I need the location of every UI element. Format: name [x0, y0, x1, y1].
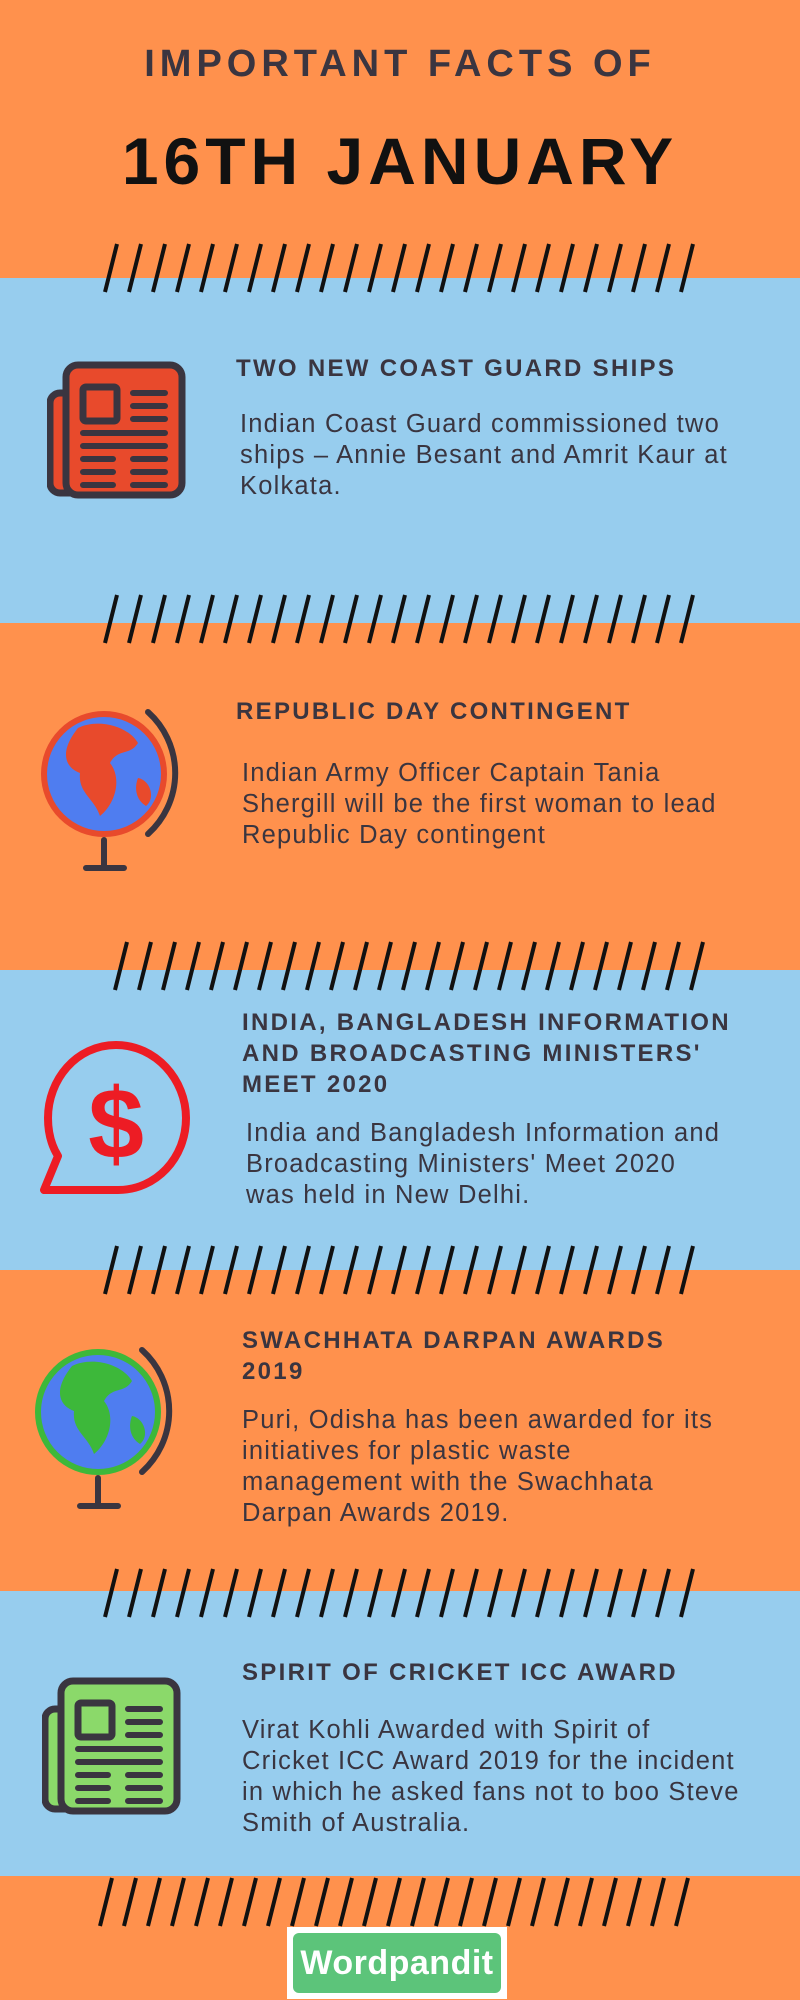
heading: INDIA, BANGLADESH INFORMATION	[242, 1009, 731, 1036]
text	[242, 1406, 713, 1527]
icon: globe red	[41, 709, 178, 871]
title: 16TH JANUARY	[122, 124, 678, 198]
icon: newspaper green	[42, 1678, 180, 1814]
panel: ministers meet	[40, 1009, 731, 1209]
text: Broadcasting Ministers' Meet 2020	[246, 1150, 676, 1178]
heading	[242, 1327, 665, 1385]
text: Virat Kohli Awarded with Spirit of	[242, 1716, 650, 1744]
panel: coast guard ships	[47, 355, 728, 500]
text: Kolkata.	[240, 472, 342, 500]
heading: REPUBLIC DAY CONTINGENT	[236, 698, 632, 725]
text: Darpan Awards 2019.	[242, 1499, 510, 1527]
divider slashes 6	[98, 1878, 690, 1926]
heading: SWACHHATA DARPAN AWARDS	[242, 1327, 665, 1354]
panel: swachhata darpan	[35, 1327, 713, 1527]
text: India and Bangladesh Information and	[246, 1119, 720, 1147]
heading: MEET 2020	[242, 1071, 389, 1098]
divider slashes 2	[103, 594, 695, 644]
icon: newspaper red	[47, 362, 186, 498]
panel: spirit of cricket	[42, 1659, 740, 1837]
logo: wordpandit	[287, 1927, 507, 1999]
heading: AND BROADCASTING MINISTERS'	[242, 1040, 702, 1067]
divider slashes 1	[103, 244, 695, 292]
title	[122, 43, 678, 198]
text: management with the Swachhata	[242, 1468, 654, 1496]
heading	[242, 1009, 731, 1098]
text: was held in New Delhi.	[246, 1181, 530, 1209]
text: Smith of Australia.	[242, 1809, 470, 1837]
title: IMPORTANT FACTS OF	[144, 43, 656, 85]
text	[246, 1119, 720, 1209]
text: Puri, Odisha has been awarded for its	[242, 1406, 713, 1434]
divider slashes 5	[103, 1568, 695, 1618]
logo: wordpandit: Wordpandit	[300, 1944, 494, 1982]
text: Shergill will be the first woman to lead	[242, 790, 717, 818]
heading: TWO NEW COAST GUARD SHIPS	[236, 355, 676, 382]
panel: republic day contingent	[41, 698, 717, 871]
divider slashes 4	[103, 1246, 695, 1294]
text: Indian Coast Guard commissioned two	[240, 410, 720, 438]
icon: globe green	[35, 1347, 172, 1509]
icon: dollar speech bubble: $	[88, 1068, 144, 1180]
text: initiatives for plastic waste	[242, 1437, 572, 1465]
icon: dollar speech bubble	[40, 1041, 190, 1194]
text	[240, 410, 728, 500]
text: Republic Day contingent	[242, 821, 546, 849]
text	[242, 759, 717, 849]
text: Indian Army Officer Captain Tania	[242, 759, 661, 787]
text: in which he asked fans not to boo Steve	[242, 1778, 740, 1806]
text	[242, 1716, 740, 1837]
heading: 2019	[242, 1358, 305, 1385]
heading: SPIRIT OF CRICKET ICC AWARD	[242, 1659, 678, 1686]
text: ships – Annie Besant and Amrit Kaur at	[240, 441, 728, 469]
text: Cricket ICC Award 2019 for the incident	[242, 1747, 735, 1775]
divider slashes 3	[113, 942, 705, 990]
